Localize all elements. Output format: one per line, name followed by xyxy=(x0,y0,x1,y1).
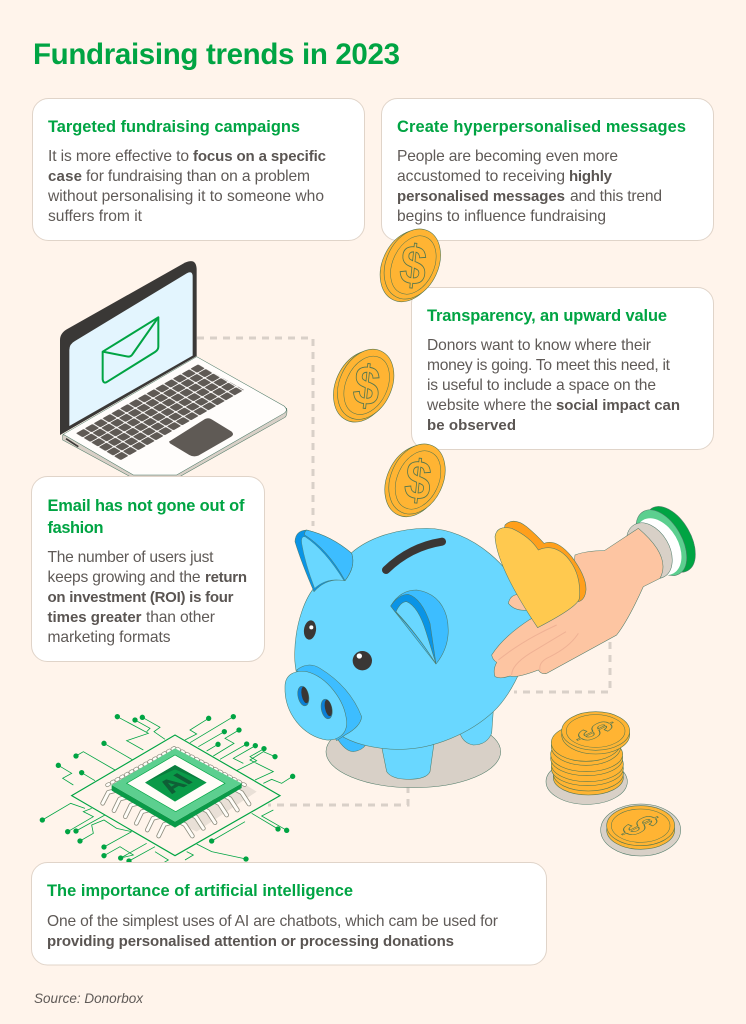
body text: The number of users just xyxy=(48,549,214,566)
icon: falling coin bottom: $ xyxy=(402,448,434,512)
body text: People are becoming even more xyxy=(397,148,618,165)
body text: suffers from it xyxy=(48,208,143,225)
body text: marketing formats xyxy=(48,629,171,646)
chip pins xyxy=(103,748,249,836)
body text: focus on a specific xyxy=(193,148,326,165)
heading: Targeted fundraising campaigns xyxy=(48,118,300,136)
hand xyxy=(492,528,663,678)
body text: One of the simplest uses of AI are chatbots, which cam be used for xyxy=(47,913,498,930)
body text: than other xyxy=(146,609,215,626)
body text: for fundraising than on a problem xyxy=(86,168,310,185)
body text: return xyxy=(205,569,247,586)
dashed connector: hand to piggy bank xyxy=(514,642,610,692)
pig shadow xyxy=(326,716,501,788)
heading xyxy=(48,497,245,537)
body text: highly xyxy=(569,168,613,185)
body text xyxy=(47,913,498,950)
panel: targeted fundraising campaigns xyxy=(32,98,364,240)
pig snout xyxy=(297,665,362,741)
coin slot xyxy=(386,542,442,570)
pig side ear xyxy=(391,590,448,664)
body text: begins to influence fundraising xyxy=(397,208,606,225)
title: Fundraising trends in 2023 xyxy=(33,38,400,71)
panel: the importance of artificial intelligence xyxy=(32,862,546,965)
chip AI label: AI xyxy=(153,770,199,797)
chip body xyxy=(112,783,242,828)
dashed connector: AI chip to piggy bank xyxy=(268,786,408,805)
chip base plate xyxy=(72,735,280,856)
icon: laptop with email envelope xyxy=(60,261,287,478)
body text: be observed xyxy=(427,417,516,434)
body text: on investment (ROI) is four xyxy=(48,589,234,606)
pig far ear xyxy=(295,530,353,592)
icon: single gold coin: $ xyxy=(609,809,670,842)
heading: Transparency, an upward value xyxy=(427,307,667,325)
panel: email has not gone out of fashion xyxy=(32,476,264,662)
body text xyxy=(397,148,662,225)
heading: The importance of artificial intelligence xyxy=(47,882,353,900)
icon: single gold coin xyxy=(601,804,681,856)
pig body xyxy=(295,528,532,749)
icon: falling coin middle: $ xyxy=(351,354,383,417)
illustration: piggy bank with hand and heart xyxy=(285,498,706,788)
body text: without personalising it to someone who xyxy=(47,188,324,205)
dashed connector: laptop to piggy bank xyxy=(197,338,313,526)
pig eyes xyxy=(303,620,317,640)
icon: falling coin top xyxy=(369,220,451,311)
heading: fashion xyxy=(48,519,104,537)
body text: It is more effective to xyxy=(48,148,189,165)
body text: providing personalised attention or processing donations xyxy=(47,933,454,950)
body text xyxy=(48,549,247,646)
icon: falling coin middle xyxy=(322,340,405,431)
heart xyxy=(503,521,586,602)
body text: accustomed to receiving xyxy=(397,168,565,185)
body text xyxy=(47,148,326,225)
body text: personalised messages xyxy=(397,188,565,205)
source note: Source: Donorbox xyxy=(34,991,144,1006)
icon: stack of gold coins xyxy=(546,712,630,804)
body text: money is going. To meet this need, it xyxy=(427,357,671,374)
panel: transparency, an upward value xyxy=(412,288,714,450)
body text: social impact can xyxy=(556,397,680,414)
icon: falling coin bottom xyxy=(374,435,456,526)
body text: keeps growing and the xyxy=(48,569,200,586)
body text: is useful to include a space on the xyxy=(427,377,656,394)
icon: AI microchip with circuit traces xyxy=(40,714,295,867)
panel: create hyperpersonalised messages xyxy=(382,98,714,240)
body text: Donors want to know where their xyxy=(427,337,651,354)
sleeve cuffs xyxy=(617,498,706,587)
heading: Email has not gone out of xyxy=(48,497,245,515)
heading: Create hyperpersonalised messages xyxy=(397,118,686,136)
body text: times greater xyxy=(48,609,142,626)
body text xyxy=(426,337,680,434)
pig legs xyxy=(460,710,493,745)
body text: website where the xyxy=(426,397,552,414)
icon: stack of gold coins: $ xyxy=(564,715,625,748)
body text: case xyxy=(48,168,82,185)
circuit traces xyxy=(40,714,295,867)
body text: and this trend xyxy=(570,188,662,205)
icon: falling coin top: $ xyxy=(397,233,429,297)
